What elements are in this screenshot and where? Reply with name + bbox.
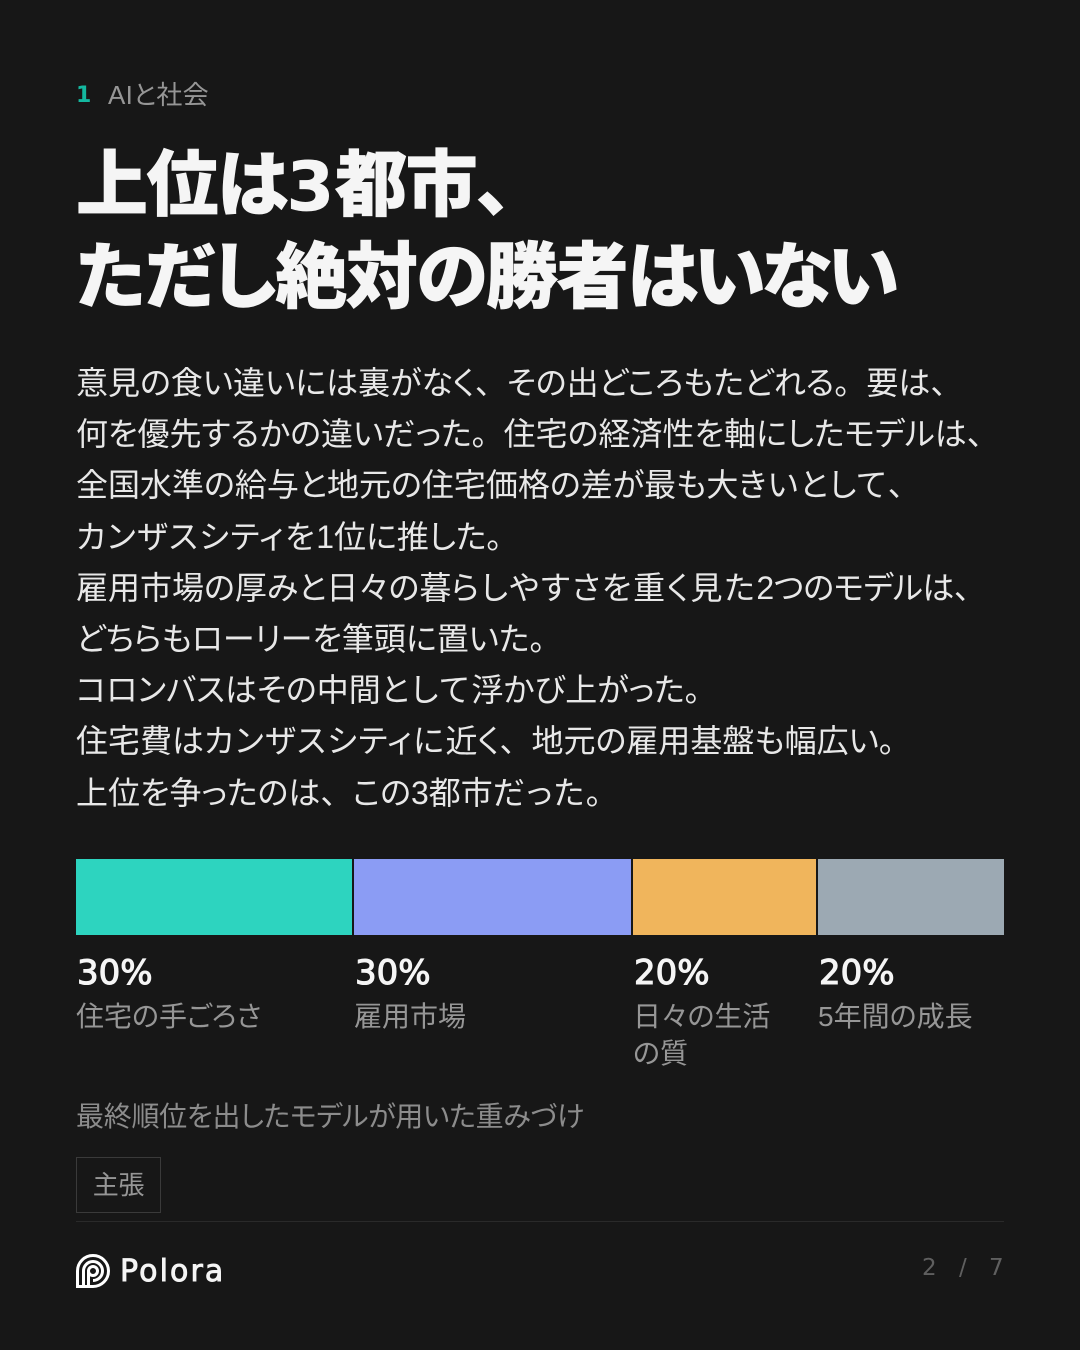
label: 日々の生活 (633, 1001, 770, 1032)
tag (76, 1157, 161, 1213)
value: 30% (355, 953, 431, 993)
legend: quality of life (633, 953, 770, 1069)
value: 20% (634, 953, 710, 993)
segment: jobs 30% (354, 859, 631, 935)
legend: jobs (354, 953, 466, 1032)
icon: Polora logo (76, 1254, 110, 1288)
stacked bar chart (76, 859, 1004, 935)
label: の質 (633, 1038, 688, 1069)
segment: growth 20% (818, 859, 1004, 935)
legend: housing (76, 953, 261, 1032)
segment: housing 30% (76, 859, 352, 935)
label (633, 1001, 770, 1069)
label: 雇用市場 (354, 1001, 466, 1032)
label: 5年間の成長 (818, 1001, 973, 1032)
body text: コロンバスはその中間として浮かび上がった。 (76, 672, 717, 708)
body text: 意見の食い違いには裏がなく、その出どころもたどれる。要は、 (76, 365, 962, 401)
tag: 主張 (93, 1170, 144, 1200)
segment: quality of life 20% (633, 859, 816, 935)
body text: どちらもローリーを筆頭に置いた。 (76, 621, 561, 657)
title: ただし絶対の勝者はいない (76, 238, 895, 318)
body text: 何を優先するかの違いだった。住宅の経済性を軸にしたモデルは、 (76, 416, 999, 452)
value: 30% (77, 953, 153, 993)
title: 上位は3都市、 (76, 146, 511, 227)
section name: AIと社会 (108, 80, 209, 110)
title (76, 146, 896, 318)
body text: 上位を争ったのは、この3都市だった。 (76, 775, 618, 811)
body text: 雇用市場の厚みと日々の暮らしやすさを重く見た2つのモデルは、 (76, 570, 986, 606)
section label (76, 80, 209, 110)
value: 20% (819, 953, 895, 993)
body text: 全国水準の給与と地元の住宅価格の差が最も大きいとして、 (76, 467, 920, 503)
brand name: Polora (120, 1254, 225, 1289)
label: 住宅の手ごろさ (76, 1001, 261, 1032)
section number: 1 (76, 83, 91, 108)
body text: 住宅費はカンザスシティに近く、地元の雇用基盤も幅広い。 (76, 723, 911, 759)
body text: カンザスシティを1位に推した。 (76, 519, 518, 555)
body text (76, 365, 999, 811)
page indicator: 2 / 7 (922, 1255, 1004, 1281)
legend: growth (818, 953, 973, 1032)
chart caption: 最終順位を出したモデルが用いた重みづけ (76, 1101, 584, 1132)
